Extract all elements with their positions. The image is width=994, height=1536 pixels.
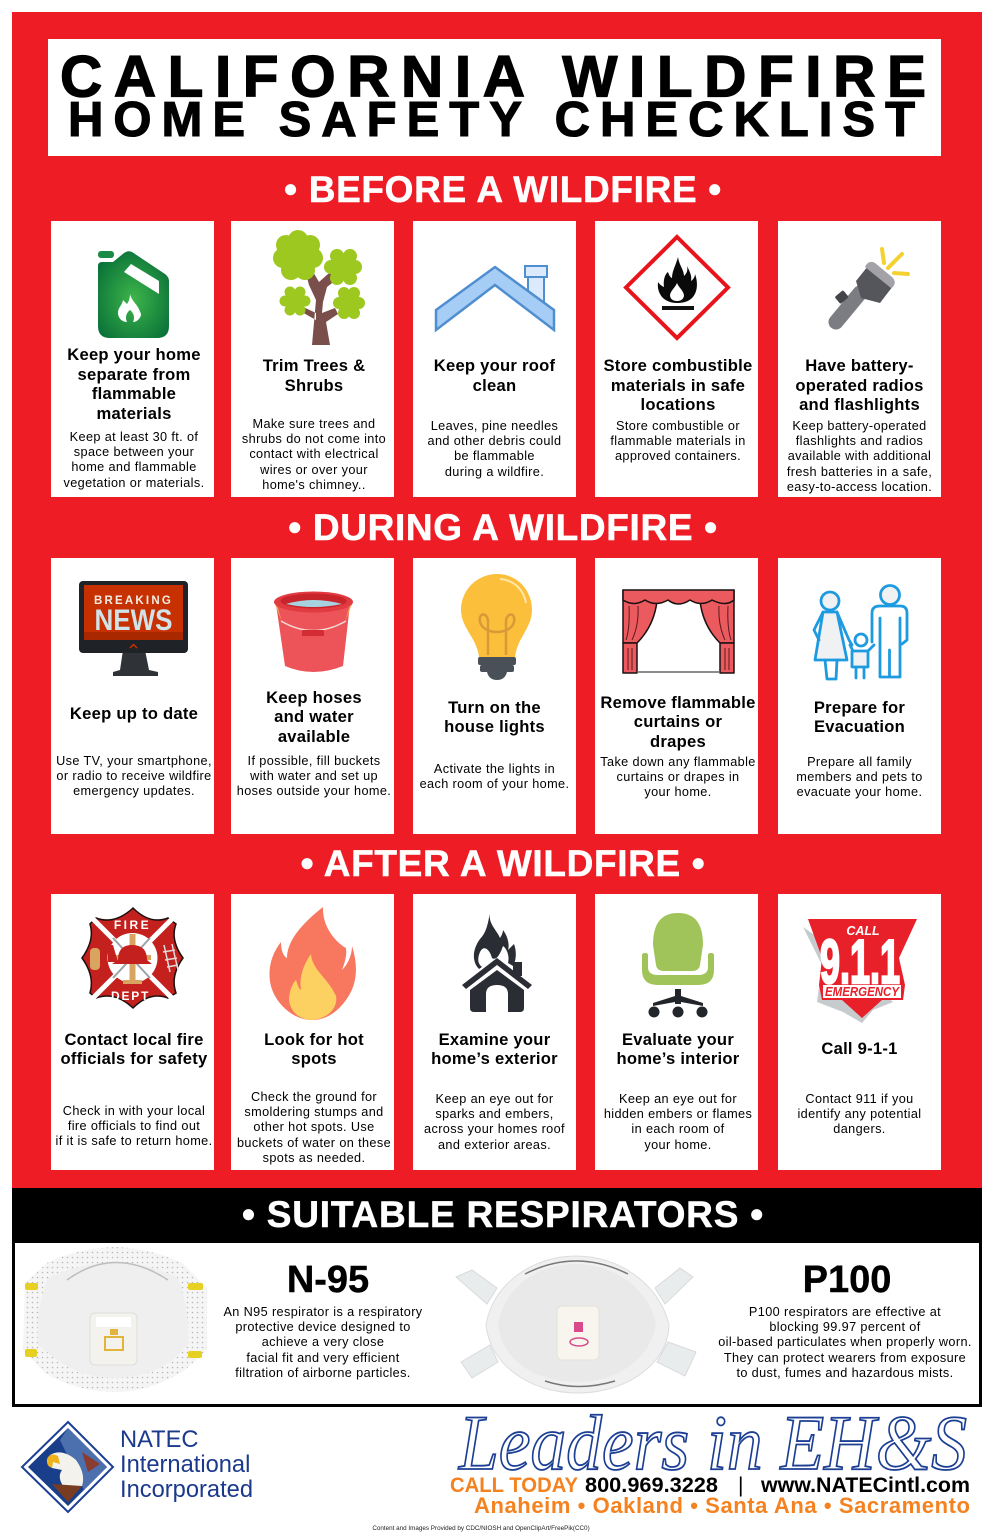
title: Examine your [439, 1030, 550, 1048]
illustration: N-95 mask [20, 1243, 215, 1398]
title [795, 356, 924, 414]
description [64, 430, 204, 490]
icon: flammable hazard diamond [623, 234, 731, 341]
heading: after a wildfire: • AFTER A WILDFIRE • [301, 843, 705, 884]
title: Store combustible [603, 356, 752, 375]
description: Keep an eye out for [619, 1092, 737, 1106]
title: Keep up to date [70, 704, 198, 723]
description: during a wildfire. [445, 465, 544, 479]
description: hidden embers or flames [604, 1107, 752, 1121]
title: Keep your home [67, 345, 201, 364]
description: P100 [700, 1304, 990, 1382]
card: roof [413, 221, 576, 497]
card: house lights [413, 558, 576, 834]
description: or radio to receive wildfire [56, 769, 212, 783]
title: operated radios [795, 376, 924, 394]
icon: green fuel can [98, 251, 169, 338]
title: Keep hoses [266, 688, 362, 706]
card: call 911 [778, 894, 941, 1170]
title: Shrubs [285, 376, 343, 394]
icon: fire department badge: DEPT. [111, 989, 154, 1003]
description: space between your [74, 445, 194, 459]
title: Contact local fire [64, 1030, 204, 1048]
panel: suitable respirators [12, 1188, 982, 1407]
icon: fire department badge [81, 907, 184, 1009]
title [814, 698, 905, 736]
description [242, 416, 386, 492]
card: evaluate interior [595, 894, 758, 1170]
credit line: Content and Images Provided by CDC/NIOSH and OpenClipArt/FreePik(CC0) [372, 1525, 590, 1532]
title: officials for safety [60, 1049, 208, 1068]
description: Contact 911 if you [805, 1092, 914, 1106]
icon: family [812, 584, 908, 680]
title [431, 1030, 558, 1068]
card: keep home separate [51, 221, 214, 497]
description: with water and set up [250, 769, 378, 783]
title [60, 1030, 208, 1068]
description: wires or over your [260, 463, 368, 477]
description: Check the ground for [251, 1090, 377, 1104]
description: Make sure trees and [253, 416, 375, 430]
description: fire officials to find out [68, 1119, 200, 1133]
description: hoses outside your home. [237, 784, 391, 798]
heading band: suitable respirators [12, 1188, 982, 1243]
contact line: CALL TODAY [450, 1474, 578, 1497]
title: Have battery- [805, 356, 914, 375]
card: remove curtains [595, 558, 758, 834]
title [596, 1030, 760, 1068]
description: flashlights and radios [796, 434, 923, 448]
description: sparks and embers, [435, 1107, 554, 1121]
icon: light bulb [461, 574, 532, 680]
description: buckets of water on these [237, 1136, 391, 1150]
heading band: suitable respirators: • SUITABLE RESPIRATORS • [242, 1194, 764, 1235]
title: materials in safe [611, 376, 745, 394]
description: Use TV, your smartphone, [56, 754, 212, 768]
description: emergency updates. [73, 784, 195, 798]
description: N-95: achieve a very close [262, 1335, 384, 1349]
icon: house on fire [462, 914, 532, 1012]
slogan and contact block [440, 1405, 990, 1523]
description: N-95: filtration of airborne particles. [235, 1366, 411, 1380]
description [237, 754, 391, 798]
description: Keep at least 30 ft. of [70, 430, 198, 444]
title: Trim Trees & [263, 356, 365, 375]
description [424, 1092, 565, 1152]
description: Check in with your local [63, 1104, 205, 1118]
title: home’s interior [616, 1049, 740, 1068]
heading: N-95: N-95 [287, 1259, 369, 1301]
description: home's chimney.. [262, 478, 366, 492]
title banner: CALIFORNIA WILDFIRE [60, 44, 926, 110]
description: evacuate your home. [797, 785, 922, 799]
title [262, 356, 365, 394]
description: if it is safe to return home. [56, 1134, 212, 1148]
icon: green chair [642, 913, 714, 1018]
description: vegetation or materials. [64, 476, 204, 490]
title: available [278, 726, 350, 746]
card: hoses and water [231, 558, 394, 834]
title [600, 692, 756, 750]
description [237, 1090, 391, 1165]
title: materials [96, 404, 172, 422]
logo text: NATEC International Incorporated: International [120, 1452, 250, 1478]
title: Keep your roof [434, 356, 555, 375]
icon: call 911 emergency sign [778, 894, 941, 1029]
title: house lights [444, 717, 545, 736]
icon: breaking news monitor: NEWS [94, 604, 172, 637]
icon: flashlight [828, 247, 910, 330]
icon: roof [434, 265, 556, 332]
description: approved containers. [615, 449, 741, 463]
description [56, 754, 212, 798]
description: P100: to dust, fumes and hazardous mists. [736, 1366, 954, 1380]
contact line [450, 1474, 970, 1497]
title [603, 356, 752, 414]
card: keep up to date [51, 558, 214, 834]
title: flammable [92, 384, 176, 403]
card: contact fire officials [51, 894, 214, 1170]
description: P100: P100 respirators are effective at [749, 1304, 941, 1318]
icon: red curtains [622, 589, 735, 674]
title: home’s exterior [431, 1049, 558, 1068]
description [596, 1092, 760, 1153]
contact line: www.NATECintl.com [760, 1474, 970, 1497]
description [428, 418, 561, 479]
title [67, 345, 201, 422]
title: Remove flammable [600, 692, 756, 712]
title banner: HOME SAFETY CHECKLIST [68, 93, 915, 147]
logo text: NATEC International Incorporated [120, 1428, 270, 1503]
heading: before a wildfire: • BEFORE A WILDFIRE • [284, 169, 722, 210]
title: Look for hot [264, 1030, 364, 1048]
icon: fire department badge: FIRE [114, 918, 151, 932]
title: Evaluate your [622, 1030, 734, 1048]
description [796, 754, 923, 799]
title: curtains or [634, 712, 722, 731]
description: your home. [644, 1138, 712, 1152]
card: radios and flashlights [778, 221, 941, 497]
title: Prepare for [814, 698, 905, 716]
heading: during a wildfire: • DURING A WILDFIRE • [288, 507, 718, 548]
description: in each room of [631, 1122, 725, 1136]
title: Evacuation [814, 717, 905, 736]
card: store combustibles [595, 221, 758, 497]
icon: flame [270, 907, 356, 1020]
description [56, 1104, 212, 1148]
description [787, 418, 932, 494]
office locations: Anaheim • Oakland • Santa Ana • Sacramento [474, 1493, 970, 1518]
description: Prepare all family [807, 754, 912, 768]
logo text: NATEC International Incorporated: NATEC [120, 1427, 199, 1453]
description: easy-to-access location. [787, 480, 932, 494]
description [778, 1092, 941, 1138]
icon: tree [273, 230, 365, 345]
title: and flashlights [799, 395, 920, 414]
description: Store combustible or [616, 418, 740, 432]
description: dangers. [833, 1122, 886, 1136]
description: identify any potential [797, 1107, 922, 1121]
title banner [48, 39, 941, 156]
icon: call 911 emergency sign: EMERGENCY [825, 985, 901, 999]
description: N-95: facial fit and very efficient [246, 1351, 400, 1365]
card: examine exterior [413, 894, 576, 1170]
description: shrubs do not come into [242, 432, 386, 446]
description: members and pets to [796, 770, 923, 784]
description [420, 762, 569, 791]
logo text: NATEC International Incorporated: Incorporated [120, 1477, 253, 1503]
description: N-95: An N95 respirator is a respiratory [223, 1304, 423, 1318]
title: separate from [78, 364, 190, 384]
description: N-95 [200, 1304, 446, 1382]
title [434, 356, 556, 394]
description: smoldering stumps and [244, 1105, 384, 1119]
description: P100: blocking 99.97 percent of [769, 1320, 921, 1334]
illustration: P100 mask [450, 1250, 700, 1400]
description: If possible, fill buckets [248, 754, 380, 768]
icon: breaking news monitor: BREAKING [94, 595, 173, 607]
title [264, 1030, 364, 1068]
title: and water [274, 707, 354, 726]
description [600, 754, 756, 799]
description: P100: oil-based particulates when properly worn. [718, 1335, 972, 1349]
description: and exterior areas. [438, 1138, 551, 1152]
description: Keep battery-operated [792, 418, 927, 432]
title: spots [291, 1049, 337, 1068]
title: locations [640, 395, 716, 414]
title [266, 688, 362, 746]
red background panel [12, 12, 982, 1192]
title [444, 698, 545, 736]
logo: NATEC eagle diamond [20, 1420, 116, 1514]
description: each room of your home. [420, 777, 569, 791]
contact line: 800.969.3228 [585, 1474, 718, 1497]
title: Turn on the [448, 698, 541, 716]
description: P100: They can protect wearers from exposure [724, 1351, 966, 1365]
description: across your homes roof [424, 1122, 565, 1136]
description: your home. [644, 785, 712, 799]
description: be flammable [454, 449, 535, 463]
description: curtains or drapes in [617, 770, 739, 784]
title: drapes [650, 732, 706, 750]
description [610, 418, 746, 463]
description: Keep an eye out for [436, 1092, 553, 1106]
title: clean [473, 376, 516, 394]
description: and other debris could [428, 434, 561, 448]
description: fresh batteries in a safe, [787, 465, 932, 479]
description: spots as needed. [263, 1151, 365, 1165]
description: home and flammable [71, 460, 197, 474]
description: available with additional [788, 449, 931, 463]
card: hot spots [231, 894, 394, 1170]
card: prepare for evacuation [778, 558, 941, 834]
description: Take down any flammable [600, 754, 756, 768]
icon: breaking news monitor [79, 581, 188, 676]
description: contact with electrical [249, 447, 379, 461]
icon: call 911 emergency sign: CALL [846, 924, 880, 938]
title: Call 9-1-1 [821, 1039, 898, 1058]
description: Leaves, pine needles [431, 418, 558, 432]
heading: P100: P100 [803, 1259, 891, 1301]
description: flammable materials in [610, 434, 746, 448]
description: N-95: protective device designed to [235, 1320, 411, 1334]
description: other hot spots. Use [253, 1120, 375, 1134]
card: trim trees [231, 221, 394, 497]
description: Activate the lights in [434, 762, 555, 776]
icon: red bucket [274, 592, 353, 672]
contact line: | [738, 1474, 743, 1497]
